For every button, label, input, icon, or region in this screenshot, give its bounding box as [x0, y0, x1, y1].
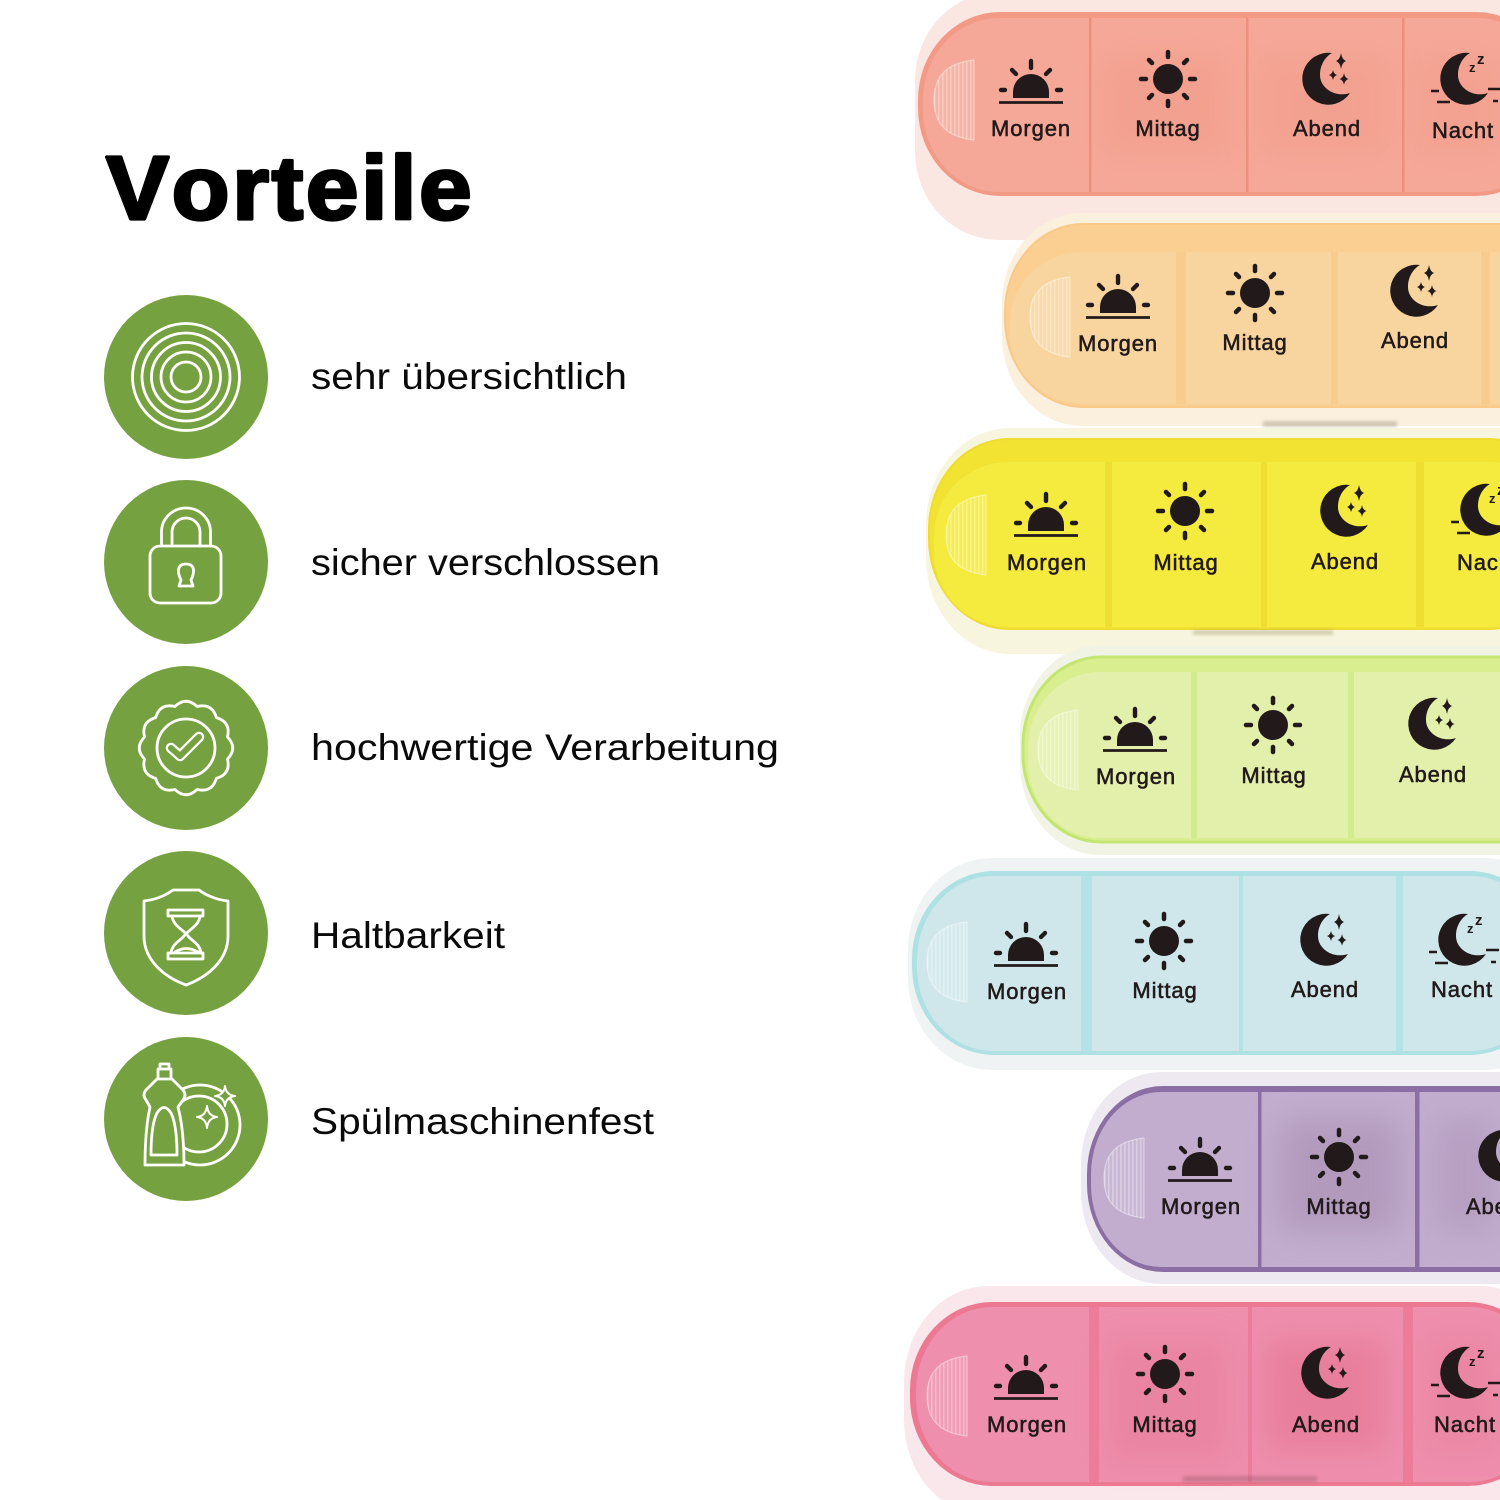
icon: concentric rings — [104, 295, 268, 459]
compartment: Nacht: z — [1477, 1345, 1484, 1362]
compartment: Nacht: Nacht — [1431, 977, 1493, 1002]
compartment: Nacht: z — [1477, 51, 1484, 68]
finger tab — [946, 495, 986, 575]
compartment: Morgen — [1078, 276, 1158, 356]
icon: quality badge with check — [104, 666, 268, 830]
label: sehr übersichtlich: sehr übersichtlich — [311, 356, 627, 397]
compartment: Abend: Abend — [1381, 328, 1449, 353]
compartment: Nacht: z — [1489, 491, 1496, 506]
compartment: Nacht — [1429, 912, 1499, 1002]
compartment: Mittag — [1306, 1130, 1372, 1219]
compartment: Abend: Abend — [1293, 116, 1361, 141]
embossed weekday text — [1263, 421, 1397, 427]
compartment: Abend — [1466, 1130, 1500, 1219]
compartment: Morgen: Morgen — [987, 979, 1067, 1004]
compartment: Abend — [1381, 265, 1449, 353]
compartment: Abend: Abend — [1291, 977, 1359, 1002]
panel: yellow pill box — [926, 428, 1500, 654]
icon: dish soap bottle and plate — [104, 1037, 268, 1201]
finger tab — [1104, 1138, 1144, 1218]
compartment: Morgen — [1007, 494, 1087, 575]
label: Spülmaschinenfest: Spülmaschinenfest — [311, 1101, 655, 1142]
finger tab — [927, 922, 967, 1002]
finger tab — [927, 1356, 967, 1436]
compartment: Abend: Abend — [1311, 549, 1379, 574]
compartment: Nacht: Nacht — [1434, 1412, 1496, 1437]
compartment: Nacht: z — [1467, 921, 1474, 936]
compartment: Abend: Abend — [1399, 762, 1467, 787]
label: Haltbarkeit: Haltbarkeit — [311, 915, 506, 956]
compartment: Morgen: Morgen — [1161, 1194, 1241, 1219]
compartment: Nacht — [1451, 482, 1500, 575]
benefit: sicher verschlossen — [104, 480, 660, 644]
compartment: Abend — [1291, 914, 1359, 1002]
compartment: Nacht — [1431, 51, 1500, 143]
benefit: hochwertige Verarbeitung — [104, 666, 779, 830]
finger tab — [934, 60, 974, 140]
compartment: Mittag — [1135, 52, 1201, 141]
compartment: Morgen: Morgen — [1078, 331, 1158, 356]
compartment: Morgen: Morgen — [987, 1412, 1067, 1437]
icon: shield with hourglass — [104, 851, 268, 1015]
compartment: Mittag: Mittag — [1153, 550, 1219, 575]
compartment: Abend — [1292, 1347, 1360, 1437]
compartment: Mittag — [1241, 698, 1307, 788]
compartment: Morgen — [987, 924, 1067, 1004]
panel: purple pill box — [1081, 1072, 1500, 1284]
benefit: Haltbarkeit — [104, 851, 506, 1015]
label: hochwertige Verarbeitung: hochwertige Verarbeitung — [311, 727, 779, 768]
compartment: Mittag: Mittag — [1222, 330, 1288, 355]
compartment: Mittag: Mittag — [1135, 116, 1201, 141]
compartment: Abend: Abend — [1292, 1412, 1360, 1437]
compartment: Morgen: Morgen — [1007, 550, 1087, 575]
finger tab — [1030, 277, 1070, 357]
label: sicher verschlossen: sicher verschlossen — [311, 542, 660, 583]
compartment: Abend — [1311, 485, 1379, 574]
compartment: Mittag — [1132, 1347, 1198, 1437]
compartment: Morgen — [987, 1357, 1067, 1437]
compartment: Mittag — [1132, 914, 1198, 1003]
compartment: Mittag — [1153, 484, 1219, 575]
compartment: Morgen: Morgen — [1096, 764, 1176, 789]
icon: padlock — [104, 480, 268, 644]
compartment: Abend — [1293, 53, 1361, 141]
compartment: Nacht: z — [1469, 60, 1476, 75]
benefit: Spülmaschinenfest — [104, 1037, 655, 1201]
compartment: Mittag: Mittag — [1306, 1194, 1372, 1219]
compartment: Nacht — [1431, 1345, 1500, 1437]
compartment: Nacht: z — [1475, 912, 1482, 929]
title: Vorteile — [106, 137, 474, 239]
compartment: Mittag: Mittag — [1132, 1412, 1198, 1437]
compartment: Morgen — [991, 61, 1071, 141]
benefit: sehr übersichtlich — [104, 295, 627, 459]
panel: coral pill box — [915, 0, 1500, 240]
compartment: Mittag: Mittag — [1241, 763, 1307, 788]
panel: blue pill box — [908, 858, 1500, 1070]
panel: green pill box — [1020, 645, 1500, 855]
compartment: Abend — [1399, 698, 1467, 787]
finger tab — [1038, 710, 1078, 790]
compartment: Nacht: z — [1469, 1354, 1476, 1369]
panel: pink pill box — [904, 1286, 1500, 1500]
compartment: Mittag — [1222, 266, 1288, 355]
panel: orange pill box — [1002, 213, 1500, 427]
compartment: Nacht: Nacht — [1432, 118, 1494, 143]
compartment: Morgen — [1161, 1139, 1241, 1219]
compartment: Morgen — [1096, 709, 1176, 789]
compartment: Morgen: Morgen — [991, 116, 1071, 141]
compartment: Mittag: Mittag — [1132, 978, 1198, 1003]
